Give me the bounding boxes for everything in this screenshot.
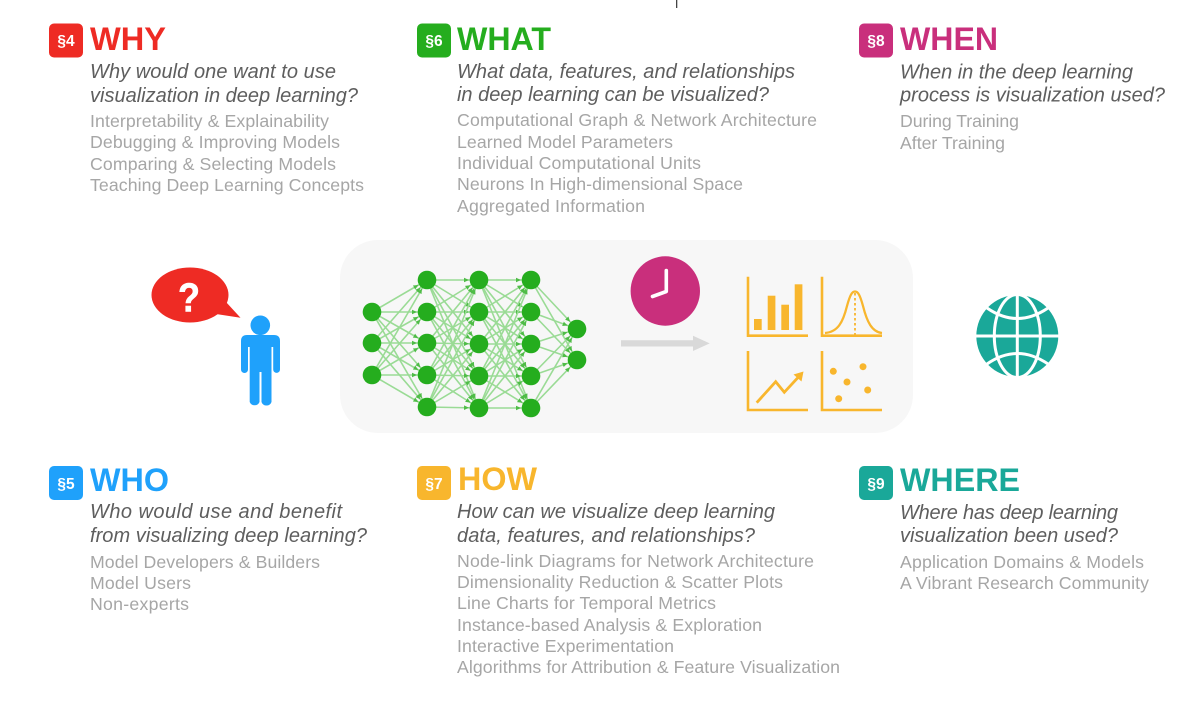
heading: when: WHEN bbox=[900, 21, 998, 57]
icon: clock bbox=[631, 256, 700, 326]
list: how topics: Interactive Experimentation bbox=[457, 636, 674, 656]
heading: who: WHO bbox=[90, 462, 169, 498]
list: how topics bbox=[457, 551, 840, 677]
heading: why: WHY bbox=[90, 21, 166, 57]
question: who: Who would use and benefit bbox=[90, 501, 343, 523]
badge: section 5 bbox=[49, 466, 83, 500]
icon: person bbox=[241, 316, 280, 406]
list: why topics: Debugging & Improving Models bbox=[90, 132, 340, 152]
question: when bbox=[899, 62, 1166, 106]
panel: why bbox=[49, 21, 364, 195]
list: who topics: Model Developers & Builders bbox=[90, 552, 320, 572]
icon: scatter plot bbox=[822, 351, 882, 410]
list: why topics bbox=[90, 111, 364, 195]
question: what bbox=[457, 61, 795, 106]
panel: when bbox=[859, 21, 1166, 153]
question: why: visualization in deep learning? bbox=[90, 85, 359, 107]
list: how topics: Algorithms for Attribution & Feature Visualization bbox=[457, 657, 840, 677]
question: where: Where has deep learning bbox=[900, 502, 1118, 524]
question: how bbox=[457, 501, 775, 547]
badge: section 7: §7 bbox=[425, 476, 443, 493]
panel: who bbox=[49, 462, 368, 614]
badge: section 4 bbox=[49, 24, 83, 58]
list: when topics bbox=[900, 111, 1019, 153]
badge: section 4: §4 bbox=[57, 33, 75, 50]
question: how: How can we visualize deep learning bbox=[457, 501, 775, 523]
list: how topics: Node-link Diagrams for Network Architecture bbox=[457, 551, 814, 571]
question: where bbox=[900, 502, 1119, 547]
badge: section 6 bbox=[417, 24, 451, 58]
icon: speech bubble with question mark: ? bbox=[178, 274, 200, 320]
icon: distribution curve bbox=[822, 277, 882, 336]
icon: speech bubble with question mark bbox=[152, 268, 240, 322]
list: who topics: Model Users bbox=[90, 573, 191, 593]
icon: globe bbox=[975, 294, 1060, 378]
question: why: Why would one want to use bbox=[90, 61, 336, 83]
list: where topics: Application Domains & Models bbox=[900, 552, 1144, 572]
icon: bar chart bbox=[748, 277, 808, 336]
badge: section 8: §8 bbox=[867, 33, 885, 50]
heading: how: HOW bbox=[458, 461, 538, 497]
arrow: model to visualizations bbox=[621, 336, 710, 351]
badge: section 6: §6 bbox=[425, 33, 443, 50]
question: what: What data, features, and relationships bbox=[457, 61, 795, 83]
list: when topics: After Training bbox=[900, 133, 1005, 153]
list: what topics: Individual Computational Units bbox=[457, 153, 701, 173]
list: where topics: A Vibrant Research Community bbox=[900, 573, 1149, 593]
question: when: When in the deep learning bbox=[900, 62, 1133, 84]
list: who topics bbox=[90, 552, 320, 614]
list: where topics bbox=[900, 552, 1149, 593]
question: when: process is visualization used? bbox=[899, 84, 1166, 106]
badge: section 5: §5 bbox=[57, 476, 75, 493]
heading: where: WHERE bbox=[900, 462, 1020, 498]
list: why topics: Teaching Deep Learning Concepts bbox=[90, 175, 364, 195]
badge: section 8 bbox=[859, 24, 893, 58]
panel: central process background bbox=[340, 240, 913, 433]
question: where: visualization been used? bbox=[900, 525, 1119, 547]
badge: section 9: §9 bbox=[867, 476, 885, 493]
list: how topics: Line Charts for Temporal Metrics bbox=[457, 593, 716, 613]
list: how topics: Dimensionality Reduction & Scatter Plots bbox=[457, 572, 783, 592]
question: who bbox=[90, 501, 368, 547]
list: what topics: Aggregated Information bbox=[457, 196, 645, 216]
badge: section 7 bbox=[417, 466, 451, 500]
panel: how bbox=[417, 461, 840, 677]
icon: line chart bbox=[748, 351, 808, 410]
list: what topics: Learned Model Parameters bbox=[457, 132, 673, 152]
list: what topics bbox=[457, 110, 817, 216]
list: why topics: Comparing & Selecting Models bbox=[90, 154, 336, 174]
list: what topics: Neurons In High-dimensional Space bbox=[457, 174, 743, 194]
heading: what: WHAT bbox=[457, 21, 551, 57]
panel: what bbox=[417, 21, 817, 216]
diagram: neural network bbox=[363, 271, 586, 417]
list: what topics: Computational Graph & Network Architecture bbox=[457, 110, 817, 130]
question: what: in deep learning can be visualized? bbox=[457, 84, 770, 106]
badge: section 9 bbox=[859, 466, 893, 500]
list: how topics: Instance-based Analysis & Exploration bbox=[457, 615, 762, 635]
question: who: from visualizing deep learning? bbox=[90, 525, 368, 547]
question: how: data, features, and relationships? bbox=[457, 525, 756, 547]
list: why topics: Interpretability & Explainability bbox=[90, 111, 329, 131]
question: why bbox=[90, 61, 359, 107]
panel: where bbox=[859, 462, 1149, 593]
list: who topics: Non-experts bbox=[90, 594, 189, 614]
list: when topics: During Training bbox=[900, 111, 1019, 131]
